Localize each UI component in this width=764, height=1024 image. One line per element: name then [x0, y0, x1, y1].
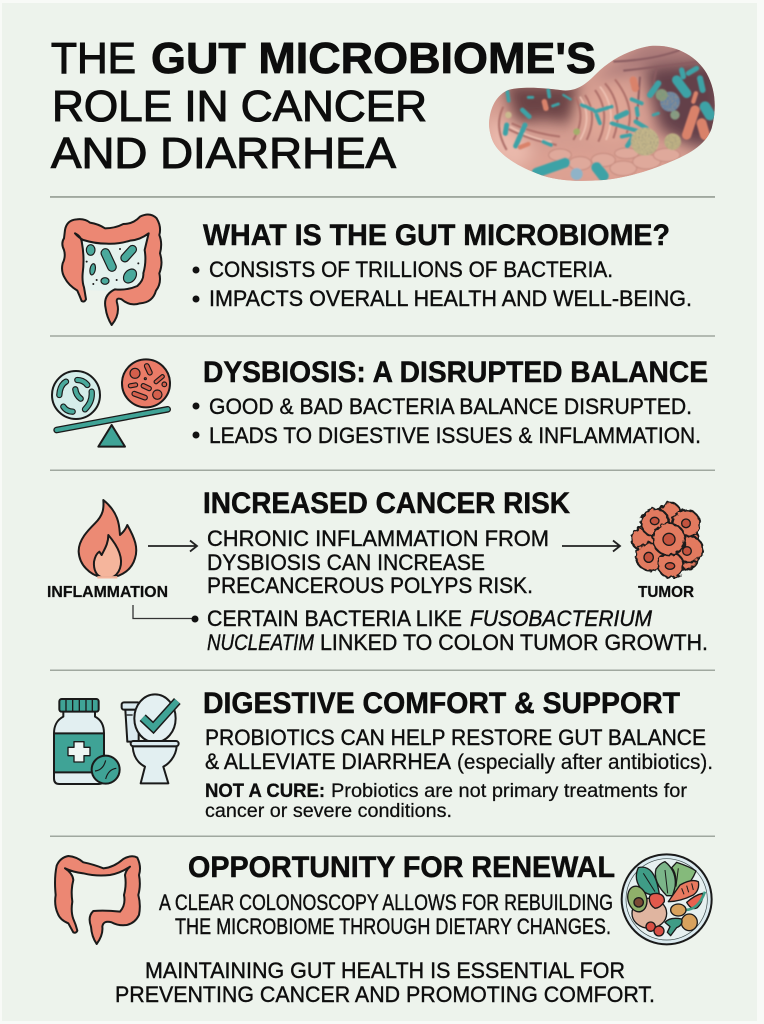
text block: certain bacteria: CERTAIN BACTERIA LIKE: [207, 606, 462, 631]
text block: chronic inflammation: CHRONIC INFLAMMATION FROM: [207, 526, 549, 551]
icon: colon: [55, 856, 140, 944]
divider: [50, 196, 715, 198]
text block: probiotics: (especially after antibiotics).: [457, 751, 713, 774]
text block: not a cure: NOT A CURE:: [205, 781, 325, 802]
section: increased cancer risk: [47, 487, 708, 655]
title: AND DIARRHEA: [51, 129, 397, 178]
text block: probiotics: & ALLEVIATE DIARRHEA: [205, 749, 452, 774]
divider: [50, 335, 715, 337]
divider: [50, 836, 715, 837]
bullet list: GOOD & BAD BACTERIA BALANCE DISRUPTED.: [209, 394, 692, 419]
divider: [50, 670, 715, 671]
heading: WHAT IS THE GUT MICROBIOME?: [203, 219, 670, 252]
heading: OPPORTUNITY FOR RENEWAL: [188, 851, 615, 884]
text block: probiotics: [205, 725, 713, 774]
text block: colonoscopy: [159, 890, 613, 939]
text block: chronic inflammation: [207, 526, 549, 598]
section: digestive comfort: [54, 687, 713, 822]
bullet list: CONSISTS OF TRILLIONS OF BACTERIA.: [209, 257, 613, 282]
section: dysbiosis: [52, 356, 708, 448]
text block: certain bacteria: FUSOBACTERIUM: [470, 606, 652, 631]
arrow: inflammation to text: [148, 540, 197, 552]
icon: tilted scale with bacteria: [52, 359, 170, 447]
closing statement: [115, 958, 655, 1007]
icon: probiotic bottle and toilet: [54, 694, 179, 784]
text block: colonoscopy: A CLEAR COLONOSCOPY ALLOWS FOR REBUILDING: [159, 890, 613, 915]
title: ROLE IN CANCER: [52, 82, 427, 131]
title: THE: [51, 34, 136, 83]
connector: inflammation to bullet: [133, 605, 192, 618]
text block: colonoscopy: THE MICROBIOME THROUGH DIETARY CHANGES.: [175, 914, 611, 939]
bullet list: [192, 394, 701, 448]
hero image: gut bacteria blob: [489, 46, 715, 181]
icon: healthy food plate: [622, 854, 712, 944]
heading: DIGESTIVE COMFORT & SUPPORT: [203, 687, 680, 720]
label: tumor: TUMOR: [638, 584, 694, 601]
text block: certain bacteria: NUCLEATIM: [207, 630, 314, 655]
closing statement: PREVENTING CANCER AND PROMOTING COMFORT.: [115, 982, 655, 1007]
section: what is the gut microbiome: [62, 215, 692, 325]
text block: probiotics: PROBIOTICS CAN HELP RESTORE GUT BALANCE: [205, 725, 706, 750]
text block: chronic inflammation: DYSBIOSIS CAN INCREASE: [207, 550, 485, 575]
bullet list: [192, 257, 692, 311]
text block: certain bacteria: LINKED TO COLON TUMOR GROWTH.: [320, 630, 708, 655]
text block: not a cure: Probiotics are not primary treatments for: [331, 780, 688, 802]
text block: chronic inflammation: PRECANCEROUS POLYPS RISK.: [207, 573, 533, 598]
icon: tumor: [632, 503, 703, 578]
text block: not a cure: [205, 780, 688, 822]
heading: INCREASED CANCER RISK: [203, 487, 570, 520]
arrow: text to tumor: [562, 540, 620, 552]
section: opportunity for renewal: [55, 851, 712, 944]
bullet list: LEADS TO DIGESTIVE ISSUES & INFLAMMATION.: [209, 423, 701, 448]
title: GUT MICROBIOME'S: [151, 34, 596, 83]
bullet list: IMPACTS OVERALL HEALTH AND WELL-BEING.: [209, 286, 692, 311]
divider: [50, 470, 715, 471]
text block: not a cure: cancer or severe conditions.: [205, 800, 452, 822]
label: inflammation: INFLAMMATION: [47, 584, 168, 601]
icon: colon with bacteria: [62, 215, 162, 325]
text block: certain bacteria: [192, 606, 708, 655]
icon: flame: [79, 500, 136, 577]
closing statement: MAINTAINING GUT HEALTH IS ESSENTIAL FOR: [145, 958, 625, 983]
heading: DYSBIOSIS: A DISRUPTED BALANCE: [203, 356, 708, 389]
title: [51, 34, 596, 178]
